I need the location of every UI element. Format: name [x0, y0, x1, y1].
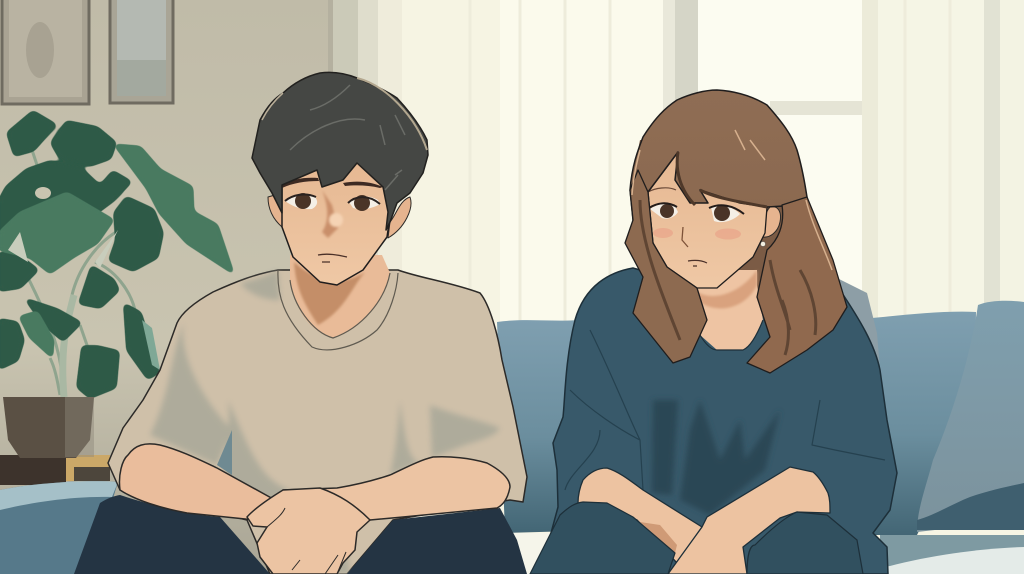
woman: eyes and features — [648, 188, 744, 266]
woman: sweater — [540, 268, 897, 574]
man — [74, 72, 527, 574]
woman: knees — [530, 502, 863, 574]
man: ears — [268, 193, 411, 238]
woman — [530, 90, 897, 574]
man: hair — [252, 72, 428, 230]
man: collar — [278, 270, 398, 350]
sofa: right back cushion — [850, 312, 976, 535]
plant pot and side table — [0, 397, 110, 485]
woman: sofa highlight behind shoulder — [835, 278, 880, 370]
man: t-shirt — [108, 270, 527, 574]
woman: ear and earring — [763, 207, 781, 237]
framed picture left — [2, 0, 89, 104]
man: left arm — [119, 444, 275, 520]
plant — [0, 112, 233, 398]
plant: stems — [20, 150, 135, 398]
sofa — [0, 301, 1024, 574]
man: neck — [290, 255, 390, 338]
man: eyes and features — [280, 178, 383, 262]
woman: right forearm and hands — [668, 467, 830, 574]
background wall — [0, 0, 335, 574]
woman: face — [648, 152, 767, 288]
woman: left forearm — [578, 468, 702, 563]
man: right arm — [283, 457, 510, 540]
man: trousers — [74, 495, 527, 574]
sofa: middle back cushion — [497, 320, 580, 533]
man: face — [282, 160, 390, 285]
sofa: left arm — [0, 481, 118, 574]
plant: dark leaves — [0, 112, 162, 397]
window and curtains — [328, 0, 1024, 330]
framed picture right — [110, 0, 173, 103]
man: nose shadow — [322, 190, 338, 238]
woman: sweater shading — [652, 400, 780, 515]
sofa: seat and bottom — [505, 533, 565, 574]
woman: neck — [690, 270, 763, 350]
man: hands — [247, 488, 370, 574]
woman: hair top and fringe — [630, 90, 807, 243]
sofa: pillow — [917, 301, 1024, 532]
plant: light leaves — [0, 145, 233, 357]
woman: hair right side — [747, 197, 847, 373]
man: shirt shading — [150, 270, 500, 574]
woman: hair back — [625, 140, 847, 373]
woman: hair left side — [625, 170, 707, 363]
